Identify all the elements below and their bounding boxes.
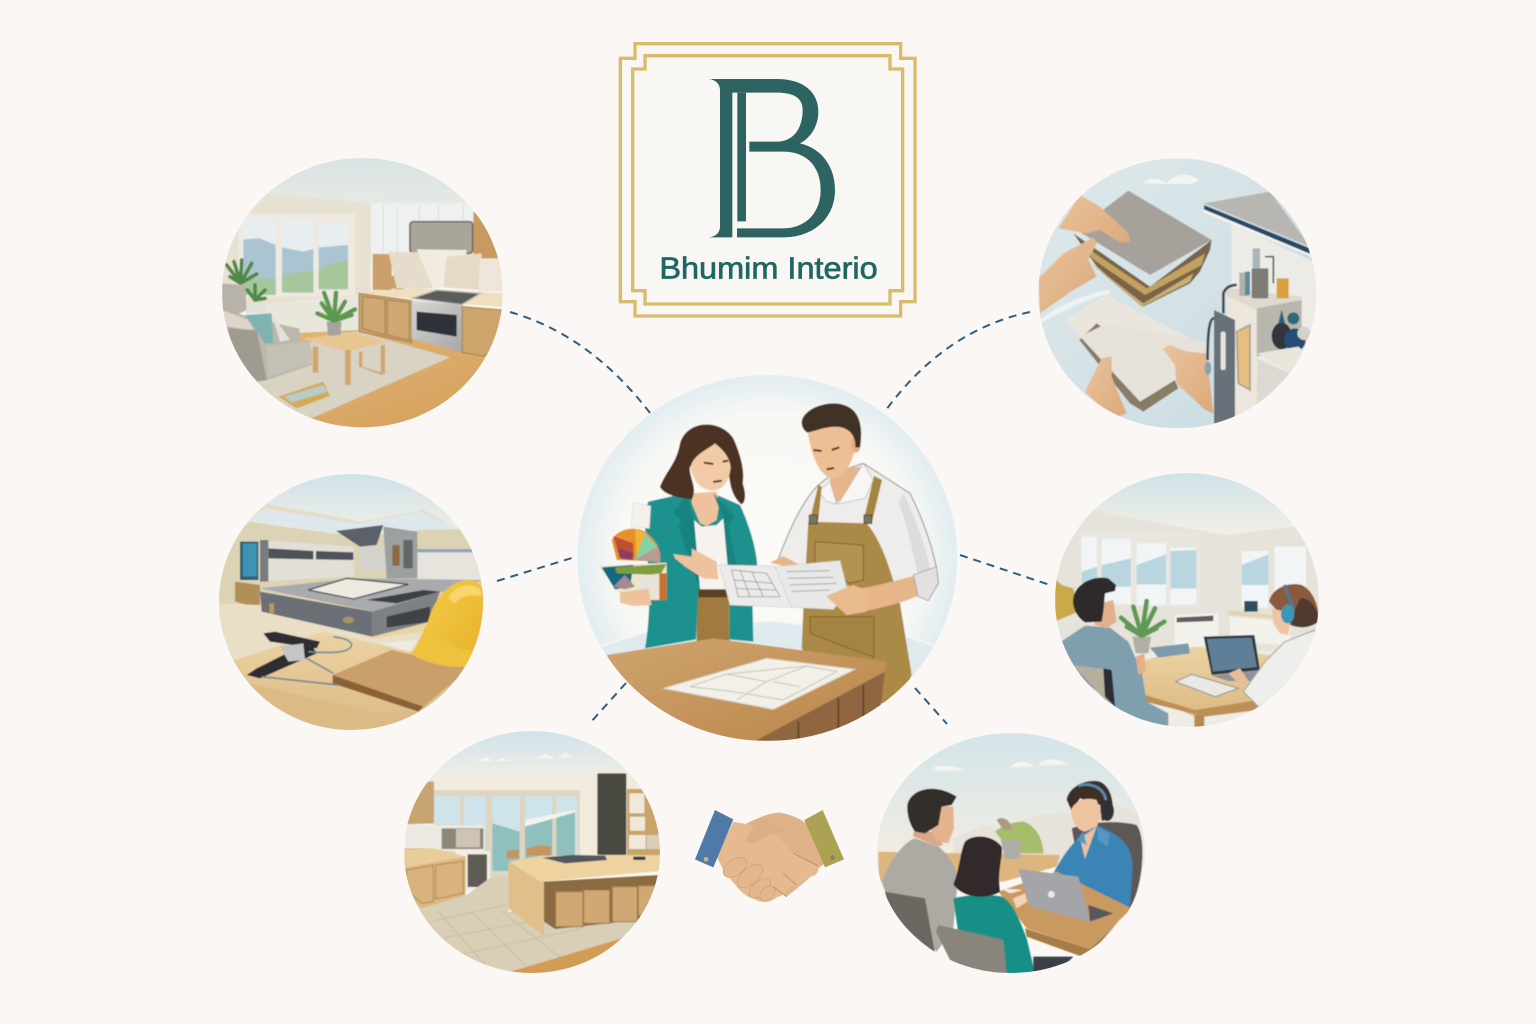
chair back dark xyxy=(1103,668,1115,707)
white oven unit xyxy=(405,825,490,892)
pot xyxy=(1001,840,1022,859)
hood xyxy=(336,525,383,547)
books on rug xyxy=(278,382,330,408)
potted plant xyxy=(317,293,355,337)
man shirt xyxy=(777,463,938,600)
man apron pocket xyxy=(815,542,863,583)
upper left cabinet xyxy=(404,782,434,824)
machine knob xyxy=(343,617,354,623)
circle: material samples and hardware xyxy=(1038,158,1317,428)
pliers tool xyxy=(247,632,352,685)
woman in teal blazer xyxy=(598,424,757,648)
headboard xyxy=(410,222,473,253)
left hand xyxy=(717,822,819,902)
island underside xyxy=(544,875,660,929)
circle: centre designers reviewing plans xyxy=(577,375,957,741)
cloud xyxy=(1143,175,1199,184)
cabinet doors xyxy=(363,297,409,340)
woman torso xyxy=(1243,630,1319,707)
finger lines xyxy=(773,853,818,897)
white sample book xyxy=(1079,323,1207,412)
clouds xyxy=(933,759,1070,771)
oven window xyxy=(417,312,457,337)
window left frame xyxy=(1080,533,1201,607)
laptop base xyxy=(1212,670,1267,682)
man shirt cuff xyxy=(913,567,938,601)
man head xyxy=(1093,600,1117,628)
woman belt xyxy=(698,589,729,597)
backdrop swoosh xyxy=(1040,290,1110,323)
table top xyxy=(607,638,886,741)
front table xyxy=(998,872,1132,949)
appliance screen xyxy=(403,540,413,568)
cabinet wall xyxy=(1232,223,1317,407)
shelf front xyxy=(1227,297,1257,420)
clouds xyxy=(478,753,573,761)
table side xyxy=(750,662,886,741)
table xyxy=(1138,647,1272,717)
woman shirt xyxy=(694,518,729,590)
wooden table xyxy=(607,638,886,741)
cushions xyxy=(388,249,503,292)
lower cabinet xyxy=(1257,358,1290,407)
circle: finished living room and kitchen xyxy=(220,158,503,428)
wood base left xyxy=(235,582,260,608)
blue ceiling band xyxy=(247,508,458,533)
base floor fill xyxy=(219,474,483,730)
man hand xyxy=(1136,653,1146,674)
folders xyxy=(1150,643,1190,658)
right hand xyxy=(747,813,827,897)
machine right side xyxy=(372,592,440,637)
white rear panels right xyxy=(417,552,483,580)
books upper layer xyxy=(284,385,327,403)
appliance column xyxy=(359,547,387,570)
floor tile lines xyxy=(432,905,582,968)
paper under hat xyxy=(378,640,417,652)
windows panes xyxy=(1082,537,1306,608)
girl body xyxy=(953,895,1035,973)
white cabinets xyxy=(1174,601,1290,648)
laptop display xyxy=(1207,638,1257,672)
shelf side xyxy=(1257,300,1302,357)
woman hair xyxy=(1067,781,1113,821)
woman hair xyxy=(1269,584,1319,627)
table edge xyxy=(1145,695,1258,717)
grey panel with slots xyxy=(1214,310,1235,427)
table side planks xyxy=(798,685,863,740)
dark vases xyxy=(1272,309,1311,352)
lower wall xyxy=(267,294,358,340)
back wood table xyxy=(878,852,1060,882)
black cable xyxy=(1208,285,1237,360)
white diagonal xyxy=(525,810,575,827)
right page xyxy=(775,561,848,609)
man face xyxy=(807,422,856,478)
wood front board edge xyxy=(243,682,423,732)
sheet on machine xyxy=(308,578,408,599)
dining chair behind xyxy=(507,845,552,858)
small knobs xyxy=(269,603,274,613)
machine top xyxy=(259,578,483,612)
fingers xyxy=(719,853,778,904)
logo wordmark: Bhumim Interio xyxy=(659,251,878,285)
left cuff button xyxy=(704,857,708,862)
armchair xyxy=(222,283,312,382)
girl hair xyxy=(953,836,1002,897)
colour fan wheel xyxy=(612,528,661,563)
left counter top xyxy=(404,848,466,868)
man eyes and mouth xyxy=(813,447,839,469)
right wall xyxy=(580,768,660,858)
woman hair dark bun xyxy=(1290,598,1319,627)
woman blazer xyxy=(645,493,757,648)
logo: Bhumim Interio xyxy=(620,44,915,316)
stack of samples xyxy=(1073,191,1212,307)
yellow plant at left xyxy=(1055,578,1078,622)
window panes xyxy=(243,218,348,295)
floor xyxy=(404,877,660,973)
man apron xyxy=(802,522,912,703)
panel lines xyxy=(383,205,463,253)
dark tall fridge xyxy=(597,773,626,855)
cooktop xyxy=(542,855,607,863)
circle: kitchen with island xyxy=(404,731,660,974)
bench seat xyxy=(373,254,405,291)
distant floor xyxy=(600,621,934,704)
blueprint sketches xyxy=(732,570,837,597)
woman face xyxy=(1272,608,1290,635)
thumb xyxy=(747,819,787,843)
table leg xyxy=(1194,715,1204,727)
icon: handshake xyxy=(695,810,844,904)
blueprint held in hands xyxy=(719,561,848,609)
plank front edge xyxy=(333,675,423,712)
plant xyxy=(1121,601,1164,653)
oven units rear xyxy=(240,540,354,582)
woman eyes and mouth xyxy=(704,461,728,482)
sky xyxy=(877,733,1145,866)
plan lines xyxy=(690,666,837,700)
rug xyxy=(220,332,450,428)
sky ceiling xyxy=(1055,473,1319,536)
headset xyxy=(1078,785,1114,821)
man right hand xyxy=(826,585,870,615)
backdrop xyxy=(1038,158,1317,428)
window wall xyxy=(433,790,580,877)
oven body xyxy=(412,301,462,353)
man ear xyxy=(851,435,861,453)
window frame xyxy=(238,213,355,297)
man hair xyxy=(802,403,861,447)
floor xyxy=(219,603,443,665)
wooden plank xyxy=(333,650,470,707)
man with apron xyxy=(770,403,938,703)
hob xyxy=(412,290,481,305)
wood floor strip xyxy=(502,925,660,974)
walls xyxy=(1055,510,1319,652)
wall xyxy=(222,193,371,310)
dark hob xyxy=(367,590,440,603)
sky xyxy=(404,731,660,784)
mountain panes xyxy=(1082,550,1268,588)
logo gold inner frame xyxy=(633,56,903,304)
wood workbench xyxy=(219,632,483,732)
trees in panes xyxy=(243,260,348,295)
left blue cuff xyxy=(695,810,733,867)
machine front xyxy=(260,592,372,637)
counter top xyxy=(1228,610,1290,620)
right olive cuff xyxy=(804,810,844,867)
left page xyxy=(719,565,792,607)
man left hand xyxy=(770,556,800,567)
plant bush xyxy=(995,822,1043,853)
rear wall xyxy=(219,522,483,605)
dried plant xyxy=(997,818,1012,830)
man apron buckles xyxy=(809,515,872,524)
woman chair xyxy=(1072,822,1142,908)
base fill xyxy=(1055,473,1319,727)
orange control xyxy=(392,545,400,566)
plant on wall side xyxy=(227,260,265,300)
circle: client meeting with laptop xyxy=(877,733,1145,973)
woman hand holding fan xyxy=(620,588,652,606)
left lower hand xyxy=(1038,237,1097,313)
distant mountains xyxy=(953,803,1139,865)
ceiling xyxy=(222,158,503,258)
lower cabinets xyxy=(359,293,412,343)
lower counter xyxy=(1257,347,1310,373)
woman blouse xyxy=(1053,825,1133,907)
woman neck xyxy=(692,492,719,526)
window panes xyxy=(434,796,577,872)
note on blazer xyxy=(631,503,651,528)
centre backdrop xyxy=(577,375,957,741)
mug and cans xyxy=(1239,248,1289,298)
coffee table xyxy=(302,333,387,385)
man torso xyxy=(1061,626,1168,728)
woman trousers xyxy=(697,588,729,642)
island drawers xyxy=(556,886,655,927)
laptop screen xyxy=(1204,635,1260,675)
girl hand xyxy=(1013,893,1027,908)
mountains in panes xyxy=(243,238,348,293)
man apron straps xyxy=(810,476,882,523)
right shelving xyxy=(627,789,660,856)
wood panel right xyxy=(473,212,503,260)
dashed connector lines xyxy=(497,312,1050,724)
right cuff button xyxy=(830,855,835,860)
woman hand xyxy=(1228,668,1249,688)
woman face xyxy=(1071,799,1102,832)
dark legs xyxy=(1033,957,1073,973)
counter top xyxy=(359,288,503,307)
woman face xyxy=(691,443,731,491)
lower right hand xyxy=(1163,345,1213,413)
floor xyxy=(220,330,503,428)
woman neck v xyxy=(1080,827,1097,859)
headset xyxy=(1281,585,1294,623)
woman collar xyxy=(1077,827,1110,847)
wall appliance xyxy=(383,527,417,578)
man hair xyxy=(1073,578,1116,622)
man lower apron pocket xyxy=(810,617,874,657)
island side xyxy=(508,862,544,936)
girl chair xyxy=(936,925,1007,973)
man shirt shading xyxy=(898,494,930,573)
woman hand xyxy=(673,548,718,579)
kitchen panels xyxy=(371,203,503,258)
island top xyxy=(508,855,660,882)
table edge xyxy=(1025,922,1118,958)
white edge xyxy=(1204,209,1313,258)
gold handle xyxy=(1237,325,1250,390)
grey lid top xyxy=(1204,192,1310,247)
circle: consultation at windowed office xyxy=(1055,473,1319,728)
woman lapels xyxy=(673,493,737,590)
white sample sheet rear xyxy=(1064,295,1190,350)
man chair xyxy=(885,892,935,953)
left counter xyxy=(404,848,466,908)
machine vent xyxy=(387,607,430,628)
chair xyxy=(1073,665,1113,707)
sky ceiling xyxy=(219,474,483,540)
pulled drop xyxy=(1205,362,1211,375)
logo gold outer frame xyxy=(620,44,915,316)
shelf top xyxy=(1215,288,1302,310)
laptop xyxy=(1018,869,1113,922)
mountain in panes xyxy=(492,812,575,872)
ceiling band xyxy=(250,503,457,530)
small item xyxy=(633,857,645,860)
blue strip xyxy=(417,549,483,552)
colour swatch cards xyxy=(598,563,667,600)
man body xyxy=(882,838,957,952)
lower left hand xyxy=(1085,357,1127,418)
circle: construction workshop with hard hat xyxy=(219,474,485,732)
left cabinet doors xyxy=(406,861,463,903)
navy edge xyxy=(1204,205,1310,257)
paper on table xyxy=(1001,888,1023,893)
man head xyxy=(927,805,954,843)
man neck xyxy=(829,467,863,503)
right cabinet xyxy=(462,307,502,356)
paper plan on table xyxy=(663,658,855,709)
logo letter B xyxy=(709,79,835,237)
slot xyxy=(1221,332,1226,370)
upper wall band xyxy=(404,777,582,792)
man collar xyxy=(818,463,873,504)
notebook xyxy=(1176,674,1238,697)
upper hand xyxy=(1058,195,1130,243)
yellow hard hat xyxy=(410,580,485,667)
woman hair back xyxy=(660,424,745,504)
man forearm xyxy=(838,576,918,612)
man neck xyxy=(913,832,943,847)
man hair xyxy=(907,789,957,833)
